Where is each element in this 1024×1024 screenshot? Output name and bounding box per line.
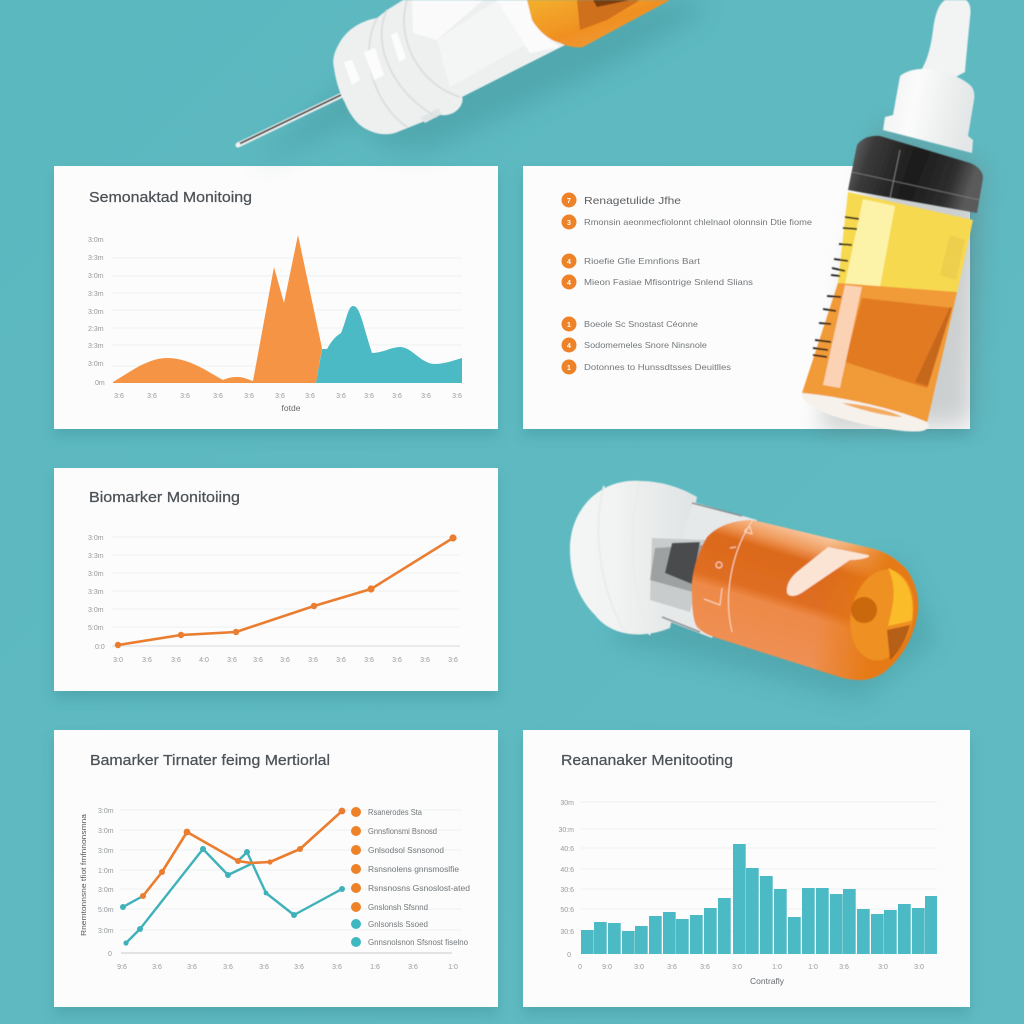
list item 4 [562, 274, 753, 290]
list item 4: Mieon Fasiae Mfisontrige Snlend Slians [584, 277, 753, 287]
legend: Rsnsnosns Gsnoslost-ated [368, 884, 470, 893]
y axis labels: line chart: 5:0m [88, 625, 104, 632]
x axis labels: line chart: 3:6 [392, 657, 402, 664]
list item 6: Sodomemeles Snore Ninsnole [584, 340, 707, 350]
gridlines: area chart [112, 258, 462, 366]
list item 6: 4 [567, 343, 571, 350]
x axis labels: area chart: 3:6 [392, 393, 402, 400]
x axis labels: area chart: 3:6 [244, 393, 254, 400]
vial end opening [842, 564, 922, 666]
y axis labels: multi line chart: 1:0m [98, 868, 114, 875]
heading: bar chart: Reananaker Menitooting [561, 752, 733, 769]
legend: Rsnsnolens gnnsmoslfie [368, 865, 460, 874]
y axis labels: area chart: 3:0m [88, 361, 104, 368]
y axis labels: area chart: 3:0m [88, 273, 104, 280]
vial orange body [692, 520, 918, 680]
x axis labels: area chart: 3:6 [114, 393, 124, 400]
x axis labels: bar chart: 0 [578, 964, 582, 971]
syringe ring highlights [344, 32, 406, 85]
y axis labels: area chart: 3:3m [88, 255, 104, 262]
y axis labels: multi line chart: 3:0m [98, 928, 114, 935]
list item 2: 3 [567, 220, 571, 227]
syringe orange barrel [527, 0, 670, 47]
y axis labels: bar chart: 30m [560, 800, 574, 807]
syringe rings [369, 0, 460, 127]
x axis labels: multi line chart: 3:6 [332, 964, 342, 971]
legend: Gnlsodsol Ssnsonod [368, 846, 444, 855]
legend: Gnslonsh Sfsnnd [368, 903, 428, 912]
y axis labels: line chart: 3:0m [88, 571, 104, 578]
x axis labels: line chart: 3:6 [227, 657, 237, 664]
x axis labels: bar chart: 1:0 [808, 964, 818, 971]
list item 3 [562, 254, 701, 268]
bars [581, 844, 937, 954]
y axis labels: multi line chart [98, 808, 114, 958]
x axis labels: bar chart: 3:0 [914, 964, 924, 971]
icon: syringe [238, 0, 670, 145]
yellow liquid [838, 192, 973, 293]
orange area [113, 235, 322, 383]
list item 5 [562, 316, 698, 332]
icon: capped vial [570, 481, 922, 680]
y axis labels: line chart: 3:3m [88, 553, 104, 560]
y axis labels: area chart: 3:0m [88, 237, 104, 244]
list item 7 [562, 360, 731, 374]
gridlines: multi line chart [120, 810, 462, 930]
heading: line chart: Biomarker Monitoiing [89, 489, 240, 506]
panel: bar chart [523, 730, 970, 1007]
syringe barrel shading [412, 0, 560, 123]
y axis labels: line chart: 0:0 [95, 644, 105, 651]
x axis labels: line chart: 3:0 [113, 657, 123, 664]
y axis labels: line chart: 3:3m [88, 589, 104, 596]
bottle scale ticks [813, 217, 859, 357]
x axis labels: multi line chart: 3:6 [187, 964, 197, 971]
legend: Gnlsonsls Ssoed [368, 920, 428, 929]
y axis labels: multi line chart: 3:0m [98, 808, 114, 815]
y axis labels: area chart [88, 237, 105, 387]
y axis labels: bar chart [558, 800, 574, 959]
x axis labels: bar chart: 3:6 [667, 964, 677, 971]
legend: Rsanerodes Sta [368, 808, 423, 817]
legend: Gnnsnolsnon Sfsnost fiselno [368, 938, 469, 947]
x axis title: area chart: fotde [282, 403, 301, 413]
panel shadows [54, 174, 970, 1015]
panel: multi line chart [54, 730, 498, 1007]
x axis labels: bar chart [578, 964, 924, 971]
list item 7: Dotonnes to Hunssdtsses Deuitlles [584, 362, 731, 372]
list item 5: 1 [567, 322, 571, 329]
heading: area chart: Semonaktad Monitoing [89, 189, 252, 206]
y axis labels: line chart [88, 535, 105, 651]
orange line with markers [115, 534, 457, 648]
x axis labels: area chart: 3:6 [275, 393, 285, 400]
list item 3: 4 [567, 259, 571, 266]
x axis labels: line chart [113, 657, 458, 664]
yellow highlight [845, 199, 895, 287]
x axis labels: multi line chart: 3:6 [294, 964, 304, 971]
list item 2 [562, 214, 812, 230]
x axis labels: bar chart: 3:0 [634, 964, 644, 971]
y axis labels: multi line chart: 3:0m [98, 887, 114, 894]
x axis labels: area chart: 3:6 [421, 393, 431, 400]
black collar [848, 136, 983, 213]
legend: Gnnsfionsmi Bsnosd [368, 827, 437, 836]
y axis labels: bar chart: 0 [567, 952, 571, 959]
y axis labels: area chart: 3:3m [88, 291, 104, 298]
list item 3: Rioefie Gfie Emnfions Bart [584, 256, 701, 266]
orange highlight [823, 285, 862, 388]
y axis labels: line chart: 3:0m [88, 535, 104, 542]
y axis labels: area chart: 0m [95, 380, 105, 387]
panel: numbered list [523, 166, 970, 429]
x axis labels: multi line chart: 9:6 [117, 964, 127, 971]
x axis labels: line chart: 3:6 [253, 657, 263, 664]
list item 7: 1 [567, 365, 571, 372]
x axis labels: bar chart: 3:6 [839, 964, 849, 971]
x axis labels: line chart: 3:6 [448, 657, 458, 664]
bottle base [802, 393, 929, 432]
list item 1: Renagetulide Jfhe [584, 195, 681, 207]
list item 5: Boeole Sc Snostast Céonne [584, 319, 698, 329]
x axis labels: multi line chart: 3:6 [259, 964, 269, 971]
legend [351, 807, 470, 947]
orange dark centre [845, 298, 952, 388]
x axis labels: line chart: 3:6 [308, 657, 318, 664]
x axis labels: multi line chart: 3:6 [408, 964, 418, 971]
y axis labels: line chart: 3:0m [88, 607, 104, 614]
y axis labels: bar chart: 30:6 [560, 929, 574, 936]
y axis labels: multi line chart: 3:0m [98, 828, 114, 835]
y axis title: Rnemtonnsne tfiot fmfnnonsmna [79, 813, 88, 936]
heading: multi line chart: Bamarker Tirnater feimg Mertiorlal [90, 752, 330, 769]
x axis labels: area chart: 3:6 [364, 393, 374, 400]
x axis labels: multi line chart [117, 964, 458, 971]
x axis labels: multi line chart: 1:6 [370, 964, 380, 971]
x axis labels: bar chart: 1:0 [772, 964, 782, 971]
y axis labels: multi line chart: 5:0m [98, 907, 114, 914]
y axis labels: bar chart: 50:6 [560, 907, 574, 914]
vial white cap [570, 481, 697, 634]
list item 6 [562, 338, 707, 352]
x axis labels: area chart: 3:6 [213, 393, 223, 400]
x axis title: bar chart: Contrafly [750, 976, 785, 986]
y axis labels: multi line chart: 0 [108, 951, 112, 958]
vial grey bands [650, 538, 708, 612]
x axis labels: line chart: 3:6 [336, 657, 346, 664]
x axis labels: bar chart: 3:0 [878, 964, 888, 971]
gridlines: line chart [112, 537, 460, 627]
x axis labels: area chart [114, 393, 462, 400]
icon: dropper bottle [802, 0, 983, 432]
x axis labels: area chart: 3:6 [305, 393, 315, 400]
dropper tip [920, 0, 971, 80]
list item 4: 4 [567, 280, 571, 287]
x axis labels: line chart: 3:6 [420, 657, 430, 664]
teal area [316, 306, 462, 383]
x axis labels: bar chart: 3:0 [732, 964, 742, 971]
vial end shading [815, 535, 918, 680]
orange liquid [802, 283, 957, 423]
x axis labels: line chart: 3:6 [171, 657, 181, 664]
panel: line chart [54, 468, 498, 691]
y axis labels: bar chart: 40:6 [560, 867, 574, 874]
dropper cap [883, 69, 974, 153]
syringe body [333, 0, 575, 134]
vial markings [704, 520, 753, 632]
y axis labels: bar chart: 30:6 [560, 887, 574, 894]
x axis labels: area chart: 3:6 [452, 393, 462, 400]
x axis labels: line chart: 4:0 [199, 657, 209, 664]
x axis labels: multi line chart: 3:6 [223, 964, 233, 971]
gridlines: bar chart [581, 802, 937, 931]
syringe shadow [252, 0, 700, 165]
list item 2: Rmonsin aeonmecfiolonnt chlelnaol olonnsin Dtie fiome [584, 217, 812, 227]
y axis labels: area chart: 3:0m [88, 309, 104, 316]
teal lines with markers [120, 846, 345, 946]
y axis labels: multi line chart: 3:0m [98, 848, 114, 855]
x axis labels: bar chart: 9:0 [602, 964, 612, 971]
y axis labels: bar chart: 30:m [558, 827, 574, 834]
list item 1 [562, 192, 681, 208]
y axis labels: bar chart: 40:6 [560, 846, 574, 853]
x axis labels: bar chart: 3:6 [700, 964, 710, 971]
vial highlight [787, 547, 869, 596]
x axis labels: line chart: 3:6 [364, 657, 374, 664]
x axis labels: line chart: 3:6 [280, 657, 290, 664]
vial shadow [610, 560, 935, 700]
x axis labels: area chart: 3:6 [147, 393, 157, 400]
y axis labels: area chart: 2:3m [88, 326, 104, 333]
panel: area chart [54, 166, 498, 429]
x axis labels: multi line chart: 3:6 [152, 964, 162, 971]
vial glass neck [660, 502, 757, 638]
y axis labels: area chart: 3:3m [88, 343, 104, 350]
x axis labels: area chart: 3:6 [336, 393, 346, 400]
orange line with markers: multi line chart [140, 808, 345, 899]
x axis labels: area chart: 3:6 [180, 393, 190, 400]
syringe needle [238, 94, 342, 145]
x axis labels: multi line chart: 1:0 [448, 964, 458, 971]
list item 1: 7 [567, 198, 571, 205]
dropper shadow [820, 120, 985, 432]
x axis labels: line chart: 3:6 [142, 657, 152, 664]
